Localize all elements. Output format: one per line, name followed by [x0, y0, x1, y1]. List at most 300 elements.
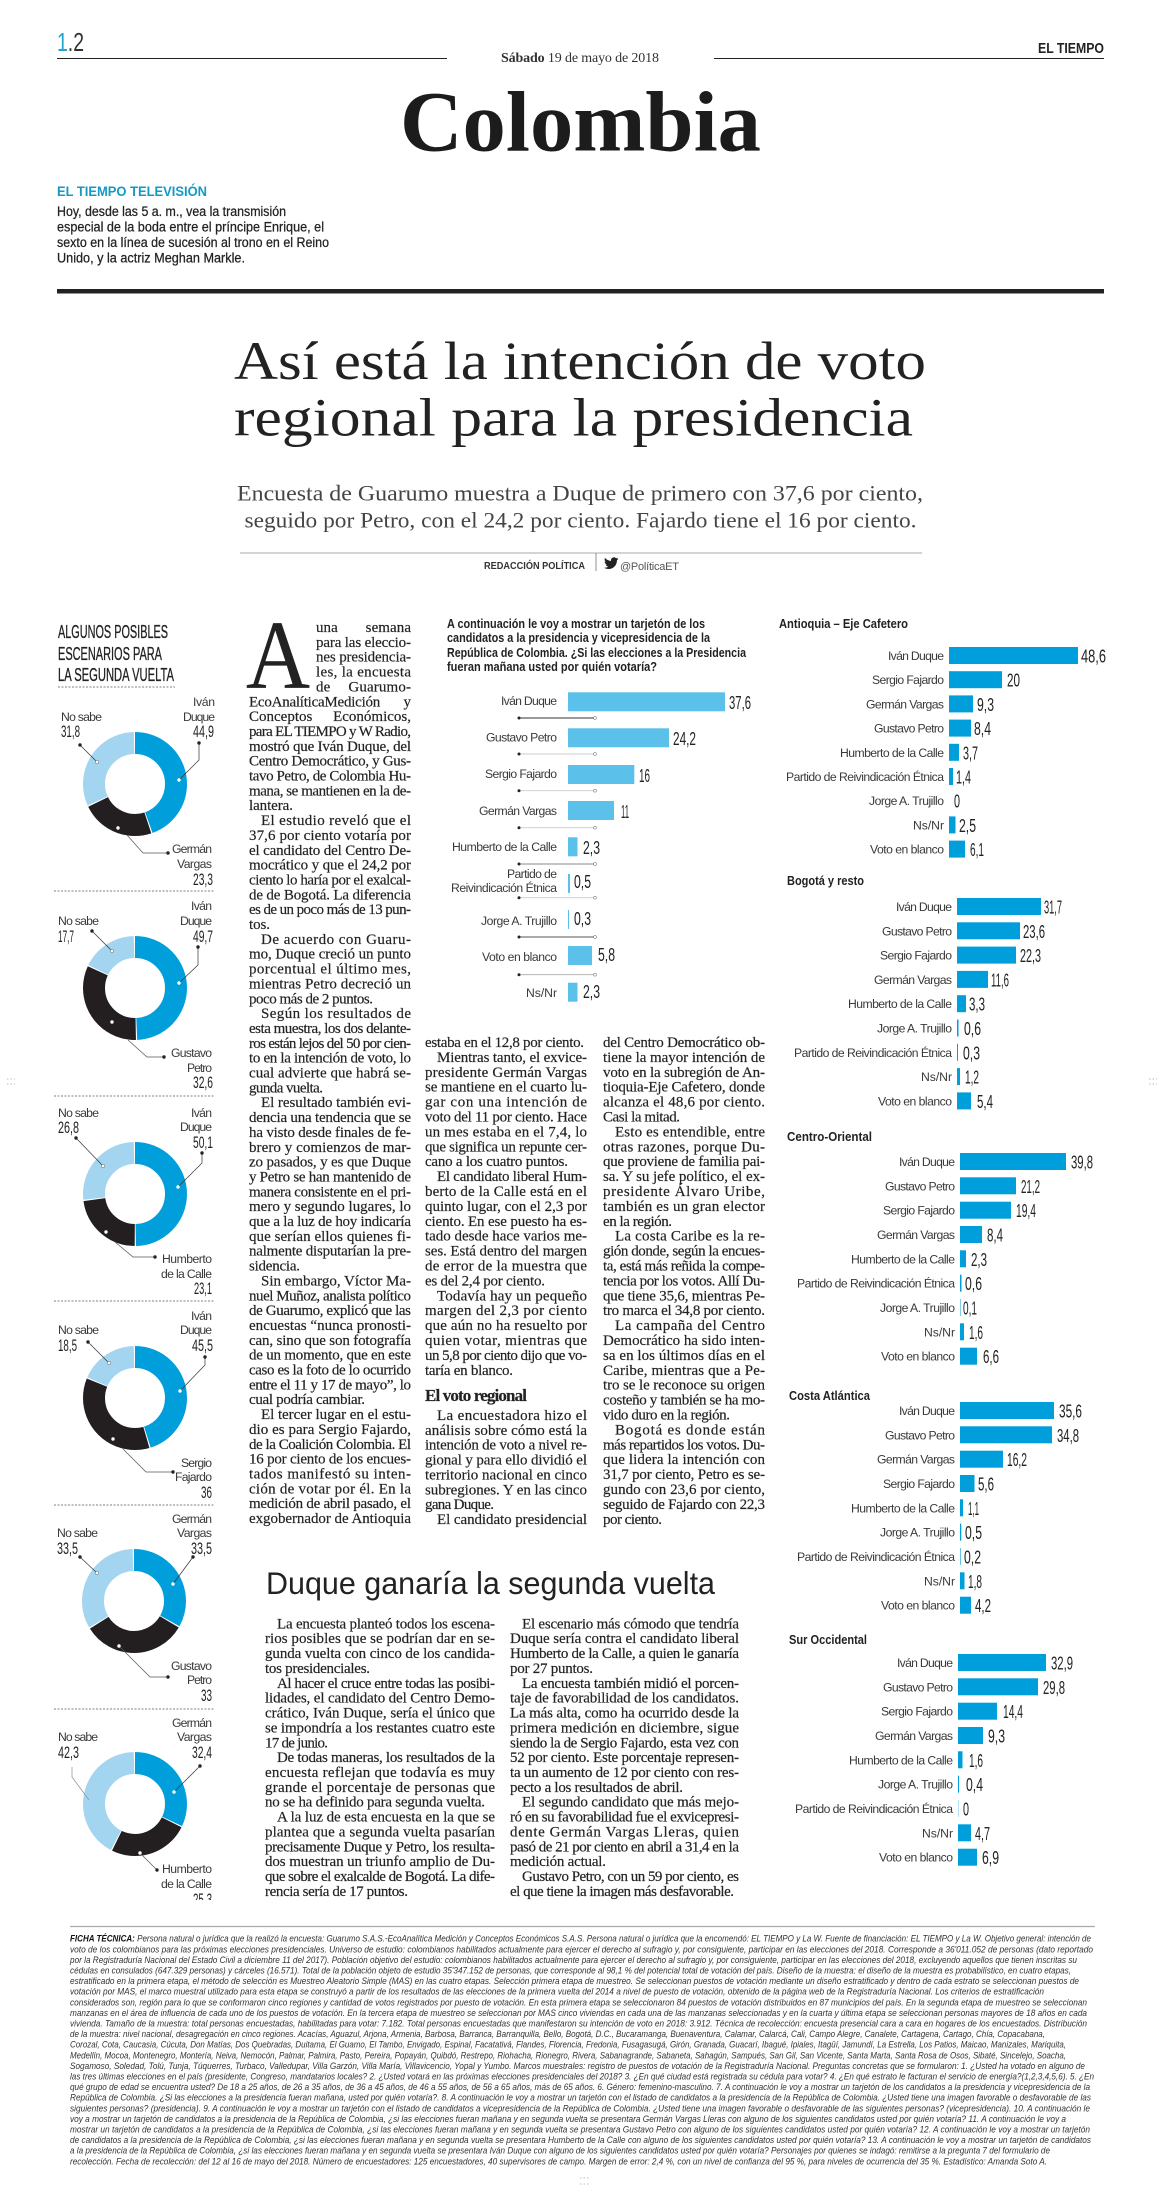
article body: third column: tencia por los votos. Allí Du-: [603, 1273, 765, 1289]
second article: right column: por 27 puntos.: [510, 1661, 593, 1677]
bar chart: Bogotá y resto: Voto en blanco: [878, 1094, 952, 1108]
bar chart: national vote intention: [447, 617, 751, 1002]
donut: Duque vs Fajardo: Sergio: [181, 1456, 212, 1470]
article body: second column: presidente Germán Vargas: [425, 1065, 587, 1081]
bar chart: Antioquia - Eje Cafetero: Ns/Nr: [913, 818, 944, 832]
article body: third column: que tiene 35,6, mientras Pe-: [603, 1288, 765, 1304]
article body: first column: ción de votar por él. En la: [249, 1481, 411, 1497]
bar chart: national vote intention: Voto en blanco: [482, 950, 557, 964]
chart question: República de Colombia. ¿Si las elecciones a la Presidencia: [447, 646, 747, 660]
donut: Duque vs Petro: [54, 899, 215, 1096]
article body: third column: Esto es entendible, entre: [615, 1124, 765, 1140]
article body: third column: sa. Y su jefe político, el ex-: [603, 1169, 765, 1185]
bar chart: Antioquia - Eje Cafetero: 48,6: [1081, 646, 1106, 666]
donut: Duque vs De la Calle: 23,1: [194, 1279, 212, 1298]
article body: second column: ses. Está dentro del margen: [425, 1244, 588, 1260]
article body: third column: también es un gran elector: [603, 1199, 765, 1215]
article body: third column: gión donde, según la encues-: [603, 1244, 765, 1260]
donut: Duque vs De la Calle: 26,8: [58, 1118, 79, 1137]
bar chart: national vote intention: Ns/Nr: [526, 986, 557, 1000]
article body: second column: intención de voto a nivel re-: [425, 1438, 587, 1454]
bar chart: Centro-Oriental: 6,6: [983, 1347, 999, 1367]
article body: first column: una semana: [316, 620, 411, 636]
article body: first column: cual podría cambiar.: [249, 1392, 365, 1408]
bar chart: Antioquia - Eje Cafetero: [779, 617, 1106, 860]
donut: Duque vs Vargas: [54, 695, 215, 891]
bar chart: Costa Atlántica: Germán Vargas: [877, 1453, 955, 1467]
article body: first column: de Guarumo-: [316, 679, 411, 695]
second article: left column: 17 de junio.: [265, 1735, 328, 1751]
article body: third column: Caribe, mientras que a Pe-: [603, 1363, 765, 1379]
article body: third column: en la región.: [603, 1214, 672, 1230]
bar chart: national vote intention: Reivindicación Étnica: [451, 880, 557, 895]
bar chart: Sur Occidental: 0,4: [966, 1775, 983, 1795]
donut: Duque vs Vargas: Vargas: [177, 857, 212, 871]
donut: Duque vs Fajardo: No sabe: [58, 1323, 99, 1337]
second article: right column: taje de favorabilidad de los candidatos.: [510, 1691, 739, 1707]
bar chart: Bogotá y resto: Humberto de la Calle: [848, 997, 952, 1011]
article body: second column: taría en blanco.: [425, 1363, 513, 1379]
bar chart: Bogotá y resto: Gustavo Petro: [882, 924, 952, 938]
second article: right column: siendo la de Sergio Fajardo, esta vez con: [510, 1735, 740, 1751]
bar chart: Costa Atlántica: Voto en blanco: [881, 1599, 955, 1613]
byline: [240, 553, 922, 573]
article body: first column: El tercer lugar en el estu-: [261, 1407, 411, 1423]
article body: third column: voto en la subregión de An-: [603, 1065, 765, 1081]
headline: [234, 331, 926, 448]
promo: El Tiempo Televisión: sexto en la línea de sucesión al trono en el Reino: [57, 235, 329, 250]
bar chart: Centro-Oriental: 21,2: [1021, 1177, 1040, 1197]
bar chart: Costa Atlántica: 16,2: [1007, 1450, 1027, 1470]
second article: left column: La encuesta planteó todos los escena-: [277, 1616, 495, 1632]
article body: first column: 37,6 por ciento votaría por: [249, 828, 411, 844]
bar chart: Costa Atlántica: Ns/Nr: [924, 1574, 955, 1588]
donut: Duque vs Petro: No sabe: [58, 914, 99, 928]
donut: Vargas vs De la Calle: 25,3: [193, 1890, 212, 1909]
article body: first column: cual advierte que habrá se-: [249, 1066, 411, 1082]
second article: right column: Humberto de la Calle, a quien le ganaría: [510, 1646, 739, 1662]
article body: second column: El candidato liberal Hum-: [437, 1169, 587, 1185]
bar chart: Sur Occidental: [789, 1633, 1073, 1868]
donut: Vargas vs De la Calle: Vargas: [177, 1730, 212, 1744]
article body: second column: subregiones. Y en las cinco: [425, 1482, 587, 1498]
article body: second column: un mes estaba en el 7,4, lo: [425, 1124, 587, 1140]
bar chart: Bogotá y resto: 1,2: [965, 1068, 979, 1088]
article body: third column: Democrático ha sido inten-: [603, 1333, 765, 1349]
bar chart: Costa Atlántica: Partido de Reivindicación Étnica: [797, 1549, 955, 1564]
article body: first column: para las eleccio-: [316, 635, 411, 651]
donut: Duque vs Vargas: No sabe: [61, 710, 102, 724]
second article: right column: ta un aumento de 12 por ciento con res-: [510, 1765, 739, 1781]
article body: first column: 16 por ciento de los encues-: [249, 1452, 411, 1468]
article body: third column: del Centro Democrático ob-: [603, 1035, 765, 1051]
second article: left column: A la luz de esta encuesta en la que se: [277, 1810, 495, 1826]
article body: first column: Según los resultados de: [261, 1006, 411, 1022]
article body: first column: ciento lo haría por el exalcal-: [249, 872, 411, 888]
subheadline: Encuesta de Guarumo muestra a Duque de primero con 37,6 por ciento,: [237, 480, 923, 506]
donut: Duque vs De la Calle: 50,1: [193, 1133, 213, 1152]
second article: right column: pasó de 21 por ciento en abril a 31,4 en la: [510, 1839, 739, 1855]
article body: first column: para EL TIEMPO y W Radio,: [249, 724, 411, 740]
bar chart: Sur Occidental: 0: [963, 1800, 969, 1820]
donut: Vargas vs De la Calle: 32,4: [192, 1743, 212, 1762]
article body: first column: gunda vuelta.: [249, 1080, 323, 1096]
bar chart: Centro-Oriental: 1,6: [969, 1323, 983, 1343]
headline: regional para la presidencia: [234, 388, 913, 448]
article body: third column: ta, está más reñida la compe-: [603, 1258, 765, 1274]
bar chart: Centro-Oriental: 0,6: [965, 1274, 982, 1294]
bar chart: Costa Atlántica: Jorge A. Trujillo: [880, 1526, 955, 1540]
bar chart: Costa Atlántica: 35,6: [1059, 1402, 1082, 1422]
bar chart: Centro-Oriental: Partido de Reivindicación Étnica: [797, 1276, 955, 1291]
article body: first column: mana, se mantienen en la de-: [249, 783, 411, 799]
sidebar heading: second round scenarios: ALGUNOS POSIBLES: [58, 621, 168, 642]
article body: second column: La encuestadora hizo el: [437, 1408, 587, 1424]
article body: second column: cano a los cuatro puntos.: [425, 1154, 568, 1170]
bar chart: Centro-Oriental: 39,8: [1071, 1152, 1093, 1172]
second article: left column: grande el porcentaje de personas que: [265, 1780, 495, 1796]
donut: Duque vs Petro: Petro: [187, 1061, 212, 1075]
donut: Vargas vs De la Calle: [58, 1716, 220, 1912]
second article: left column: dos muestran un triunfo amplio de Du-: [265, 1854, 495, 1870]
donut: Vargas vs Petro: 33: [201, 1686, 212, 1705]
second article: left column: plantea que a segunda vuelta pasarían: [265, 1824, 496, 1840]
donut: Duque vs Fajardo: Duque: [180, 1323, 212, 1337]
article body: first column: caso es la foto de lo ocurrido: [249, 1362, 411, 1378]
article body: third column: seguido de Fajardo con 22,3: [603, 1497, 765, 1513]
bar chart: Antioquia - Eje Cafetero: 20: [1007, 671, 1020, 691]
header: page number, date and brand: EL TIEMPO: [1038, 40, 1104, 57]
article body: third column: otras razones, porque Du-: [603, 1139, 765, 1155]
bar chart: Costa Atlántica: 1,1: [968, 1499, 979, 1519]
bar chart: Bogotá y resto: Germán Vargas: [874, 973, 952, 987]
bar chart: Antioquia - Eje Cafetero: Partido de Reivindicación Étnica: [786, 769, 944, 784]
bar chart: Antioquia - Eje Cafetero: 2,5: [959, 816, 976, 836]
donut: Duque vs De la Calle: de la Calle: [161, 1267, 212, 1281]
article body: first column: lantera.: [249, 798, 293, 814]
article body: first column: de Guarumo, explicó que las: [249, 1303, 411, 1319]
bar chart: Centro-Oriental: Voto en blanco: [881, 1350, 955, 1364]
bar chart: Costa Atlántica: Costa Atlántica: [789, 1389, 871, 1403]
article body: first column: manera consistente en el pri-: [249, 1184, 411, 1200]
article body: third column: sa en los últimos días en el: [603, 1348, 765, 1364]
article body: second column: análisis sobre cómo está la: [425, 1423, 587, 1439]
chart question: fueran mañana usted por quién votaría?: [447, 660, 657, 674]
article body: second column: Mientras tanto, el exvice-: [437, 1050, 587, 1066]
bar chart: Costa Atlántica: 1,8: [968, 1572, 982, 1592]
bar chart: Bogotá y resto: 23,6: [1023, 922, 1045, 942]
donut: Duque vs De la Calle: Duque: [180, 1120, 212, 1134]
bar chart: Centro-Oriental: Ns/Nr: [924, 1325, 955, 1339]
technical sheet: ficha técnica: votación por MAS, el marco muestral utilizado para esta etapa se construyó a partir de los resultados de las elecciones de la primera vuelta del 2014 a nivel de puesto de votación, obtenido de la página web de la Registraduría Nacional. Los criterios de estratificación: [70, 1986, 1044, 1997]
bar chart: national vote intention: Jorge A. Trujillo: [481, 914, 557, 928]
second article: right column: 52 por ciento. Este porcentaje represen-: [510, 1750, 739, 1766]
donut: Duque vs Fajardo: Fajardo: [175, 1470, 212, 1484]
second article: left column: rencia sería de 17 puntos.: [265, 1884, 408, 1900]
article body: second column: gana Duque.: [425, 1497, 494, 1513]
article body: first column: nuel Muñoz, analista político: [249, 1288, 411, 1304]
article body: first column: exgobernador de Antioquia: [249, 1511, 411, 1527]
article body: first column: encuestas “nunca pronosti-: [249, 1318, 411, 1334]
donut: Duque vs Petro: Gustavo: [171, 1046, 212, 1060]
subheadline: [237, 480, 923, 532]
donut: Vargas vs Petro: 33,5: [191, 1539, 212, 1558]
bar chart: Antioquia - Eje Cafetero: Germán Vargas: [866, 697, 944, 711]
donut: Duque vs De la Calle: Iván: [191, 1106, 212, 1120]
article body: first column: esta muestra, los dos delante-: [249, 1021, 411, 1037]
donut: Duque vs Vargas: 23,3: [193, 870, 213, 889]
bar chart: Sur Occidental: 9,3: [988, 1726, 1005, 1746]
article body: first column: mero y segundo lugares, lo: [249, 1199, 411, 1215]
article body: first column: Centro Democrático, y Gus-: [249, 754, 411, 770]
article body: third column: [603, 1035, 766, 1528]
bar chart: Sur Occidental: 32,9: [1051, 1654, 1073, 1674]
article body: third column: tioquia-Eje Cafetero, donde: [603, 1080, 765, 1096]
bar chart: Centro-Oriental: Humberto de la Calle: [851, 1252, 955, 1266]
bar chart: national vote intention: 11: [621, 802, 629, 822]
donut: Duque vs De la Calle: [54, 1106, 215, 1301]
bar chart: Bogotá y resto: Jorge A. Trujillo: [877, 1022, 952, 1036]
bar chart: national vote intention: 5,8: [598, 945, 615, 965]
article body: second column: berto de la Calle está en el: [425, 1184, 587, 1200]
bar chart: Sur Occidental: Sergio Fajardo: [881, 1705, 953, 1719]
article body: third column: tro se le reconoce su origen: [603, 1378, 766, 1394]
bar chart: Antioquia - Eje Cafetero: Antioquia – Eje Cafetero: [779, 617, 908, 631]
bar chart: national vote intention: 37,6: [729, 693, 751, 713]
bar chart: Centro-Oriental: Centro-Oriental: [787, 1130, 872, 1144]
bar chart: Sur Occidental: Humberto de la Calle: [849, 1753, 953, 1767]
bar chart: Antioquia - Eje Cafetero: 8,4: [974, 719, 991, 739]
article body: second column: El voto regional: [425, 1386, 527, 1405]
technical sheet: ficha técnica: recolección. Fecha de recolección: del 12 al 16 de mayo del 2018. Número de encuestadores: 125 encuestadores, 40 supervisores de campo. Margen de error: 2,4 %, con un nivel de confianza del 95 %, para niveles de ocurrencia del 35 %. Estadístico: Amanda Soto A.: [70, 2155, 1047, 2166]
donut: Duque vs De la Calle: Humberto: [162, 1252, 212, 1266]
donut: Vargas vs Petro: No sabe: [57, 1526, 98, 1540]
bar chart: Costa Atlántica: Gustavo Petro: [885, 1428, 955, 1442]
donut: Duque vs Petro: 17,7: [58, 927, 74, 946]
bar chart: Bogotá y resto: Bogotá y resto: [787, 874, 864, 888]
article body: first column: de la Coalición Colombia. El: [249, 1437, 411, 1453]
article body: third column: que lidera la intención con: [603, 1452, 766, 1468]
donut: Duque vs Fajardo: 36: [201, 1483, 212, 1502]
article body: third column: por ciento.: [603, 1512, 662, 1528]
bar chart: Sur Occidental: Jorge A. Trujillo: [878, 1778, 953, 1792]
article body: second column: un 5,8 por ciento dijo que vo-: [425, 1348, 587, 1364]
bar chart: Costa Atlántica: [789, 1389, 1082, 1616]
bar chart: Sur Occidental: 1,6: [969, 1751, 983, 1771]
donut: Duque vs Vargas: Iván: [193, 695, 215, 709]
bar chart: Centro-Oriental: [787, 1130, 1093, 1367]
second article: left column: precisamente Duque y Petro, los resulta-: [265, 1839, 495, 1855]
article body: third column: costeño y también se ha mo-: [603, 1393, 765, 1409]
technical sheet: ficha técnica: [69, 1926, 1095, 2166]
promo: El Tiempo Televisión: EL TIEMPO TELEVISIÓN: [57, 184, 207, 199]
drop cap: A: [246, 602, 310, 710]
second article: right column: pecto a los resultados de abril.: [510, 1780, 683, 1796]
second article: left column: rios posibles que se podrían dar en se-: [265, 1631, 495, 1647]
second article: right column: medición actual.: [510, 1854, 606, 1870]
bar chart: national vote intention: 0,5: [574, 872, 591, 892]
bar chart: Sur Occidental: 6,9: [982, 1848, 999, 1868]
donut: Duque vs Fajardo: [54, 1309, 215, 1505]
bar chart: Centro-Oriental: Iván Duque: [899, 1155, 955, 1169]
header: page number, date and brand: Sábado 19 de mayo de 2018: [501, 51, 659, 66]
donut: Duque vs Petro: Iván: [191, 899, 212, 913]
bar chart: Bogotá y resto: 0,3: [963, 1043, 980, 1063]
second article: right column: Gustavo Petro, con un 59 por ciento, es: [522, 1869, 739, 1885]
second article: left column: lidades, el candidato del Centro Demo-: [265, 1691, 495, 1707]
article body: second column: gar con una intención de: [425, 1095, 587, 1111]
article body: third column: más repartidos los votos. Du-: [603, 1437, 765, 1453]
bar chart: Sur Occidental: Ns/Nr: [922, 1826, 953, 1840]
bar chart: Bogotá y resto: [787, 874, 1062, 1112]
bar chart: Costa Atlántica: Iván Duque: [899, 1404, 955, 1418]
second article: left column: encuesta reflejan que todavía es muy: [265, 1765, 496, 1781]
second article: left column: [265, 1616, 496, 1900]
bar chart: Antioquia - Eje Cafetero: Humberto de la Calle: [840, 746, 944, 760]
article body: second column: El candidato presidencial: [437, 1512, 587, 1528]
bar chart: Sur Occidental: 14,4: [1003, 1702, 1023, 1722]
donut: Vargas vs Petro: Gustavo: [171, 1659, 212, 1673]
promo: El Tiempo Televisión: [57, 184, 329, 266]
article body: first column: les, la encuesta: [316, 665, 411, 681]
donut: Duque vs Vargas: Germán: [172, 842, 212, 856]
article body: first column: de de Bogotá. La diferencia: [249, 887, 411, 903]
byline: REDACCIÓN POLÍTICA: [484, 559, 585, 572]
second article: left column: que sobre el exalcalde de Bogotá. La dife-: [265, 1869, 495, 1885]
article body: first column: mostró que Iván Duque, del: [249, 739, 411, 755]
sidebar heading: second round scenarios: LA SEGUNDA VUELTA: [58, 664, 174, 685]
article body: first column: dio es para Sergio Fajardo,: [249, 1422, 411, 1438]
donut: Duque vs Vargas: Duque: [183, 710, 215, 724]
bar chart: Costa Atlántica: 5,6: [978, 1474, 994, 1494]
donut: Duque vs Fajardo: 45,5: [192, 1336, 213, 1355]
headline: Así está la intención de voto: [234, 331, 926, 391]
bar chart: Antioquia - Eje Cafetero: Iván Duque: [888, 649, 944, 663]
donut: Vargas vs Petro: Petro: [187, 1673, 212, 1687]
bar chart: Centro-Oriental: Jorge A. Trujillo: [880, 1301, 955, 1315]
article body: first column: ha visto desde finales de fe-: [249, 1125, 411, 1141]
bar chart: national vote intention: 24,2: [673, 729, 696, 749]
subheadline: seguido por Petro, con el 24,2 por ciento. Fajardo tiene el 16 por ciento.: [244, 508, 916, 532]
bar chart: Antioquia - Eje Cafetero: Sergio Fajardo: [872, 673, 944, 687]
bar chart: Centro-Oriental: Sergio Fajardo: [883, 1204, 955, 1218]
second article: right column: La encuesta también midió el porcen-: [522, 1676, 739, 1692]
bar chart: Bogotá y resto: 22,3: [1020, 946, 1041, 966]
article body: second column: [425, 1035, 588, 1528]
donut: Vargas vs Petro: 33,5: [57, 1539, 78, 1558]
second article: left column: se impondría a los restantes cuatro este: [265, 1720, 495, 1736]
article body: third column: 31,7 por ciento, Petro es se-: [603, 1467, 765, 1483]
bar chart: Bogotá y resto: Ns/Nr: [921, 1070, 952, 1084]
bar chart: national vote intention: Humberto de la Calle: [452, 840, 557, 854]
bar chart: Bogotá y resto: 3,3: [969, 995, 985, 1015]
article body: third column: tiene la mayor intención de: [603, 1050, 765, 1066]
donut: Vargas vs De la Calle: de la Calle: [161, 1877, 212, 1891]
bar chart: Bogotá y resto: 11,6: [991, 970, 1009, 990]
header: page number, date and brand: 1.2: [57, 27, 84, 57]
bar chart: Antioquia - Eje Cafetero: 0: [954, 792, 960, 812]
article body: first column: y Petro se han mantenido de: [249, 1170, 411, 1186]
donut: Duque vs Fajardo: 18,5: [58, 1336, 77, 1355]
sidebar heading: second round scenarios: ESCENARIOS PARA: [58, 643, 162, 664]
article body: first column: El resultado también evi-: [261, 1095, 411, 1111]
article body: third column: tro marca el 34,8 por ciento.: [603, 1303, 765, 1319]
second article: left column: gunda vuelta con cinco de los candida-: [265, 1646, 495, 1662]
article body: first column: de un momento, que en este: [249, 1348, 411, 1364]
article body: second column: tado desde hace varios me-: [425, 1229, 587, 1245]
bar chart: Costa Atlántica: 34,8: [1057, 1426, 1079, 1446]
article body: second column: que aún no ha resuelto por: [425, 1318, 587, 1334]
article body: first column: EcoAnalíticaMedición y: [249, 694, 412, 710]
bar chart: Centro-Oriental: Germán Vargas: [877, 1228, 955, 1242]
article body: second column: quinto lugar, con el 2,3 por: [425, 1199, 587, 1215]
article body: first column: poco más de 2 puntos.: [249, 991, 373, 1007]
article body: first column: dencia una tendencia que se: [249, 1110, 411, 1126]
article body: first column: to en la intención de voto, lo: [249, 1051, 411, 1067]
sidebar heading: second round scenarios: [58, 621, 175, 687]
bar chart: Sur Occidental: 4,7: [975, 1824, 990, 1844]
article body: first column: mientras Petro decreció un: [249, 976, 412, 992]
article body: second column: estaba en el 12,8 por ciento.: [425, 1035, 584, 1051]
article body: second column: de error de la muestra que: [425, 1258, 587, 1274]
bar chart: Bogotá y resto: 31,7: [1044, 898, 1062, 918]
article body: third column: Casi la mitad.: [603, 1110, 680, 1126]
article body: second column: Todavía hay un pequeño: [437, 1288, 587, 1304]
article body: first column: tos.: [249, 917, 270, 933]
bar chart: Sur Occidental: Partido de Reivindicación Étnica: [795, 1801, 953, 1816]
article body: first column: can, sino que son fotografía: [249, 1333, 411, 1349]
bar chart: national vote intention: Gustavo Petro: [486, 730, 557, 744]
second article: right column: La más alta, como ha ocurrido desde la: [510, 1706, 739, 1722]
donut: Duque vs Petro: 32,6: [193, 1073, 213, 1092]
bar chart: national vote intention: Iván Duque: [501, 694, 557, 708]
byline: @PolíticaET: [620, 561, 679, 573]
donut: Vargas vs De la Calle: 42,3: [58, 1743, 79, 1762]
donut: Vargas vs Petro: Vargas: [177, 1526, 212, 1540]
second article: right column: dente Germán Vargas Lleras, quien: [510, 1824, 740, 1840]
article body: first column: Sin embargo, Víctor Ma-: [261, 1273, 411, 1289]
donut: Duque vs Fajardo: Iván: [191, 1309, 212, 1323]
bar chart: Antioquia - Eje Cafetero: 3,7: [963, 743, 978, 763]
bar chart: Sur Occidental: Sur Occidental: [789, 1633, 867, 1647]
bar chart: Centro-Oriental: 19,4: [1016, 1201, 1036, 1221]
article body: second column: ciento. En ese puesto ha es-: [425, 1214, 587, 1230]
second article: right column: [510, 1616, 740, 1900]
bar chart: national vote intention: 2,3: [583, 982, 600, 1002]
article body: third column: alcanza el 48,6 por ciento.: [603, 1095, 765, 1111]
donut: Duque vs Petro: 49,7: [193, 927, 213, 946]
bar chart: national vote intention: Partido de: [507, 867, 557, 881]
donut: Duque vs De la Calle: No sabe: [58, 1106, 99, 1120]
second article: left column: De todas maneras, los resultados de la: [277, 1750, 495, 1766]
article body: first column: entre el 11 y 17 de mayo”, lo: [249, 1377, 411, 1393]
chart question: [447, 617, 747, 674]
article body: first column: mocrático y que el 24,2 por: [249, 858, 411, 874]
article body: third column: Bogotá es donde están: [615, 1422, 766, 1438]
bar chart: national vote intention: 16: [639, 766, 650, 786]
bar chart: Antioquia - Eje Cafetero: Voto en blanco: [870, 843, 944, 857]
article body: first column: ros están lejos del 50 por cien-: [249, 1036, 411, 1052]
article body: third column: gundo con 23,6 por ciento,: [603, 1482, 765, 1498]
promo: El Tiempo Televisión: Hoy, desde las 5 a. m., vea la transmisión: [57, 204, 286, 219]
bar chart: Antioquia - Eje Cafetero: Jorge A. Trujillo: [869, 794, 944, 808]
article body: first column: el candidato del Centro De-: [249, 843, 411, 859]
header: page number, date and brand: [57, 27, 1104, 66]
second article: right column: ró en su favorabilidad fue el exvicepresi-: [510, 1810, 739, 1826]
article body: third column: La costa Caribe es la re-: [615, 1229, 765, 1245]
bar chart: Costa Atlántica: Humberto de la Calle: [851, 1501, 955, 1515]
second article: right column: El segundo candidato que más mejo-: [522, 1795, 739, 1811]
